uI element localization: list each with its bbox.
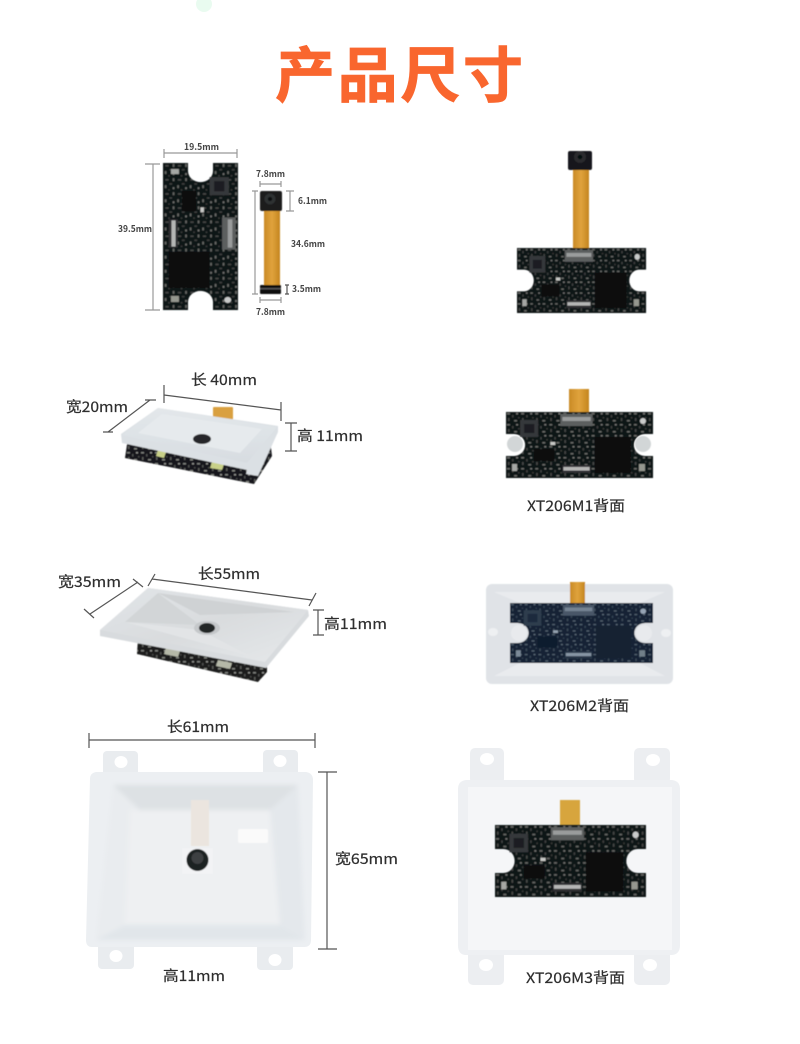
panel: M3 front view with dimensions (86, 716, 398, 986)
shell funnel faces (96, 785, 305, 940)
dimension: length 55mm: 长55mm (198, 563, 260, 584)
dimension: height 11mm: 高 11mm (297, 425, 363, 446)
title: 产品尺寸 (275, 28, 523, 115)
frosted shell (100, 588, 309, 668)
flex cable shadow (191, 800, 209, 846)
product photo (100, 588, 309, 682)
label: XT206M2背面 (530, 695, 629, 716)
dimension labels: camera module: 6.1mm (298, 194, 327, 207)
mounting tabs (468, 748, 670, 985)
dimension: board height 39.5mm: 39.5mm (118, 222, 152, 235)
dimension: width 20mm: 宽20mm (66, 396, 128, 417)
flex cable peeking out (213, 407, 233, 420)
frosted shell (458, 780, 680, 955)
camera lens (193, 434, 211, 444)
circuit board underneath (137, 638, 267, 682)
tab holes (110, 755, 286, 966)
label: XT206M1背面 (527, 495, 625, 516)
dimension: width 65mm: 宽65mm (335, 848, 398, 869)
dimension labels: camera module: 7.8mm (256, 305, 285, 318)
circuit board underneath (125, 438, 272, 484)
dimension: board height 39.5mm (118, 164, 160, 310)
frosted shell (121, 408, 278, 476)
panel: M3 back view (458, 748, 680, 988)
flex cable (569, 389, 589, 413)
dimension: height 11mm (285, 423, 363, 451)
dimension: width 35mm (58, 571, 143, 618)
circuit board (517, 248, 646, 313)
dimension: board width 19.5mm: 19.5mm (184, 140, 219, 153)
dimension: length 55mm (148, 563, 316, 606)
flex cable (560, 800, 580, 826)
camera lens (194, 621, 220, 635)
mounting discs (507, 436, 651, 452)
dimension labels: camera module: 3.5mm (292, 282, 321, 295)
flex cable (570, 582, 585, 604)
notch fills (511, 625, 652, 641)
panel: M1 back view (506, 389, 653, 516)
camera (568, 151, 592, 170)
board photo (506, 389, 653, 478)
notch fills (496, 853, 645, 869)
vertical circuit board (163, 163, 238, 310)
panel: bare module dimensions (118, 140, 327, 318)
dimension: width 65mm (318, 772, 398, 949)
LED glow (238, 829, 268, 843)
dimension: width 35mm: 宽35mm (58, 571, 121, 592)
frosted shell (486, 584, 673, 684)
dimension: length 40mm (164, 369, 281, 421)
label: XT206M3背面 (526, 967, 625, 988)
dimension: length 61mm: 长61mm (167, 716, 229, 737)
panel: M2 back view (486, 582, 673, 716)
dimension: height 11mm: 高11mm (324, 613, 387, 634)
shell inner face (468, 787, 672, 950)
board in shell photo (486, 582, 673, 684)
decorative mint spot at top (196, 0, 212, 12)
circuit board (510, 603, 653, 663)
dimension: width 20mm (66, 396, 156, 432)
dimension labels: camera module: 7.8mm (256, 167, 285, 180)
dimension: height 11mm (313, 610, 387, 635)
dimension: height 11mm: 高11mm (163, 965, 225, 986)
panel: M1 product with dimensions (66, 369, 363, 484)
dimension: length 61mm (89, 716, 315, 748)
camera module with flex cable (260, 191, 282, 294)
flex cable (573, 168, 589, 250)
dimension labels: camera module: 34.6mm (291, 237, 325, 250)
dimension: board width 19.5mm (164, 140, 237, 158)
circuit board (506, 412, 653, 478)
mounting tabs (98, 750, 298, 970)
product photo (121, 407, 278, 484)
camera (182, 848, 213, 874)
dimension: length 40mm: 长 40mm (191, 369, 257, 390)
frosted shell (86, 772, 313, 947)
dimension labels: camera module (252, 167, 327, 318)
tab holes (479, 753, 660, 971)
panel: assembled board with camera (517, 151, 646, 313)
panel: M2 product with dimensions (58, 563, 387, 682)
circuit board (495, 825, 646, 897)
